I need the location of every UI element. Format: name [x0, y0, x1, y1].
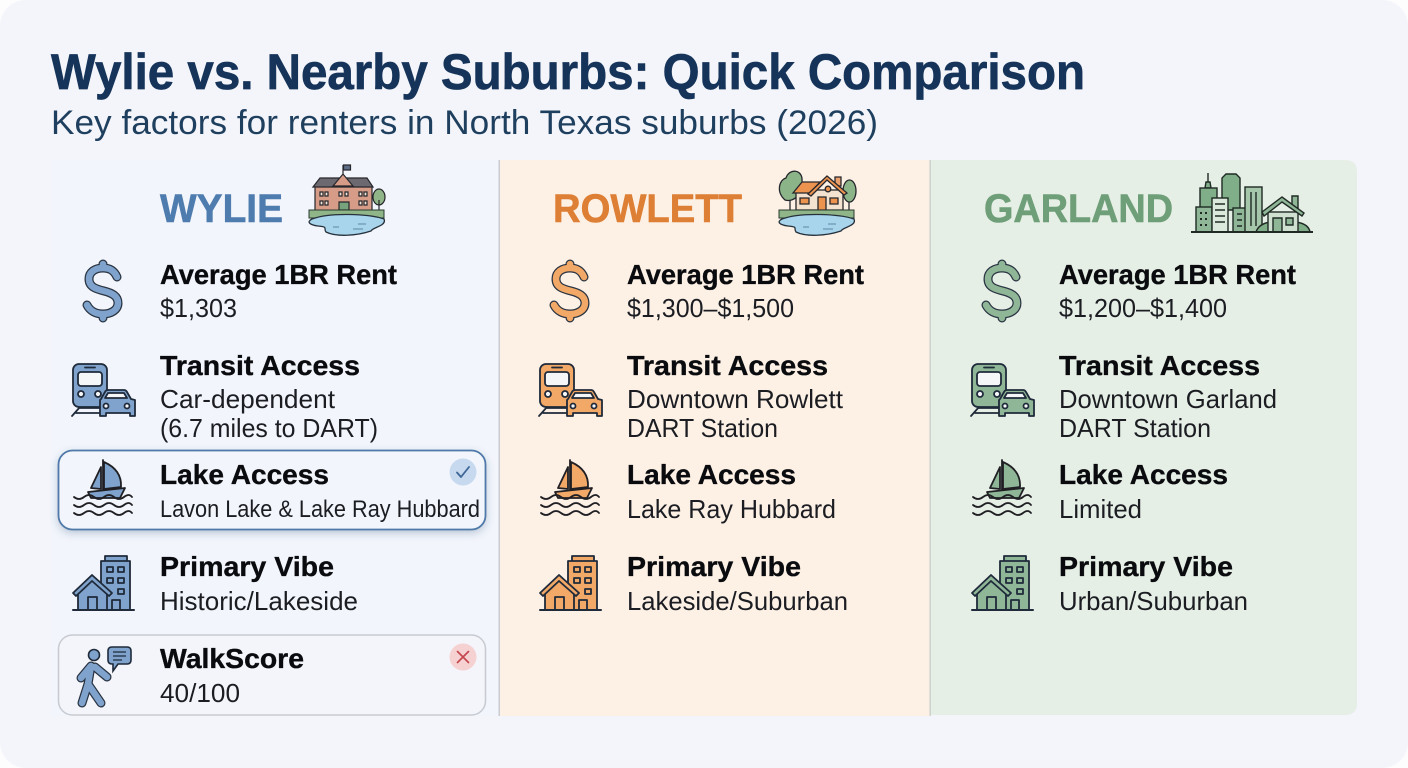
icon: train and car: [72, 364, 135, 416]
label: transit: Transit Access: [1059, 350, 1260, 381]
heading: Wylie: WYLIE: [160, 187, 283, 231]
icon: house and building: [540, 556, 601, 610]
panel: Rowlett: [500, 160, 930, 716]
row: transit: [971, 350, 1277, 443]
icon: sailboat: [973, 460, 1031, 515]
label: lake: Lake Access: [1059, 459, 1228, 490]
subtitle: Key factors for renters in North Texas suburbs (2026): [51, 104, 878, 142]
row: transit: [72, 350, 378, 443]
panel: Wylie: [51, 160, 500, 716]
value: transit: Downtown Garland: [1059, 384, 1277, 414]
value: walkscore: 40/100: [160, 678, 240, 708]
badge: check: [450, 458, 476, 486]
row: rent: [87, 259, 397, 323]
value: lake: Lake Ray Hubbard: [627, 494, 836, 524]
value: rent: $1,300–$1,500: [627, 293, 794, 323]
badge: cross: [450, 644, 476, 670]
icon: house and building: [972, 556, 1033, 610]
label: lake: Lake Access: [627, 459, 796, 490]
row: vibe: [540, 551, 848, 616]
value: transit distance: (6.7 miles to DART): [160, 413, 378, 443]
icon: house and building: [73, 556, 134, 610]
value: lake: Lavon Lake & Lake Ray Hubbard: [160, 496, 480, 523]
value: lake: Limited: [1059, 494, 1142, 524]
label: vibe: Primary Vibe: [627, 551, 801, 582]
row: rent: [986, 259, 1296, 323]
icon: train and car: [539, 364, 602, 416]
icon: city skyline with house: [1191, 173, 1313, 232]
row: transit: [539, 350, 844, 443]
value: transit station: DART Station: [1059, 413, 1211, 443]
value: transit: Car-dependent: [160, 384, 336, 414]
row: vibe: [972, 551, 1248, 616]
heading: Rowlett: ROWLETT: [553, 187, 742, 231]
icon: sailboat: [541, 460, 599, 515]
row: vibe: [73, 551, 358, 616]
value: transit: Downtown Rowlett: [627, 384, 844, 414]
label: transit: Transit Access: [160, 350, 360, 381]
value: rent: $1,303: [160, 293, 237, 323]
label: rent: Average 1BR Rent: [1059, 259, 1296, 290]
icon: suburban house by a lake: [779, 171, 856, 235]
row: rent: [554, 259, 864, 323]
heading: Garland: GARLAND: [984, 187, 1173, 231]
row: lake: [973, 459, 1228, 524]
icon: historic school by a lake: [309, 165, 385, 235]
label: vibe: Primary Vibe: [160, 551, 334, 582]
icon: dollar: [986, 264, 1017, 318]
icon: dollar: [554, 264, 585, 318]
card: walkscore: [58, 635, 486, 715]
panel: Garland: [930, 160, 1357, 716]
icon: train and car: [971, 364, 1034, 416]
value: transit station: DART Station: [627, 413, 778, 443]
icon: dollar: [87, 264, 118, 318]
label: walkscore: WalkScore: [160, 643, 304, 674]
card: lake access: [58, 450, 486, 530]
label: lake: Lake Access: [160, 459, 329, 490]
label: rent: Average 1BR Rent: [160, 259, 397, 290]
value: vibe: Lakeside/Suburban: [627, 586, 848, 616]
value: rent: $1,200–$1,400: [1059, 293, 1227, 323]
label: rent: Average 1BR Rent: [627, 259, 864, 290]
icon: walker with speech bubble: [81, 647, 131, 703]
value: vibe: Urban/Suburban: [1059, 586, 1248, 616]
title: Wylie vs. Nearby Suburbs: Quick Comparison: [51, 44, 1085, 100]
label: vibe: Primary Vibe: [1059, 551, 1233, 582]
label: transit: Transit Access: [627, 350, 828, 381]
value: vibe: Historic/Lakeside: [160, 586, 358, 616]
row: lake: [541, 459, 836, 524]
icon: sailboat: [74, 460, 132, 515]
